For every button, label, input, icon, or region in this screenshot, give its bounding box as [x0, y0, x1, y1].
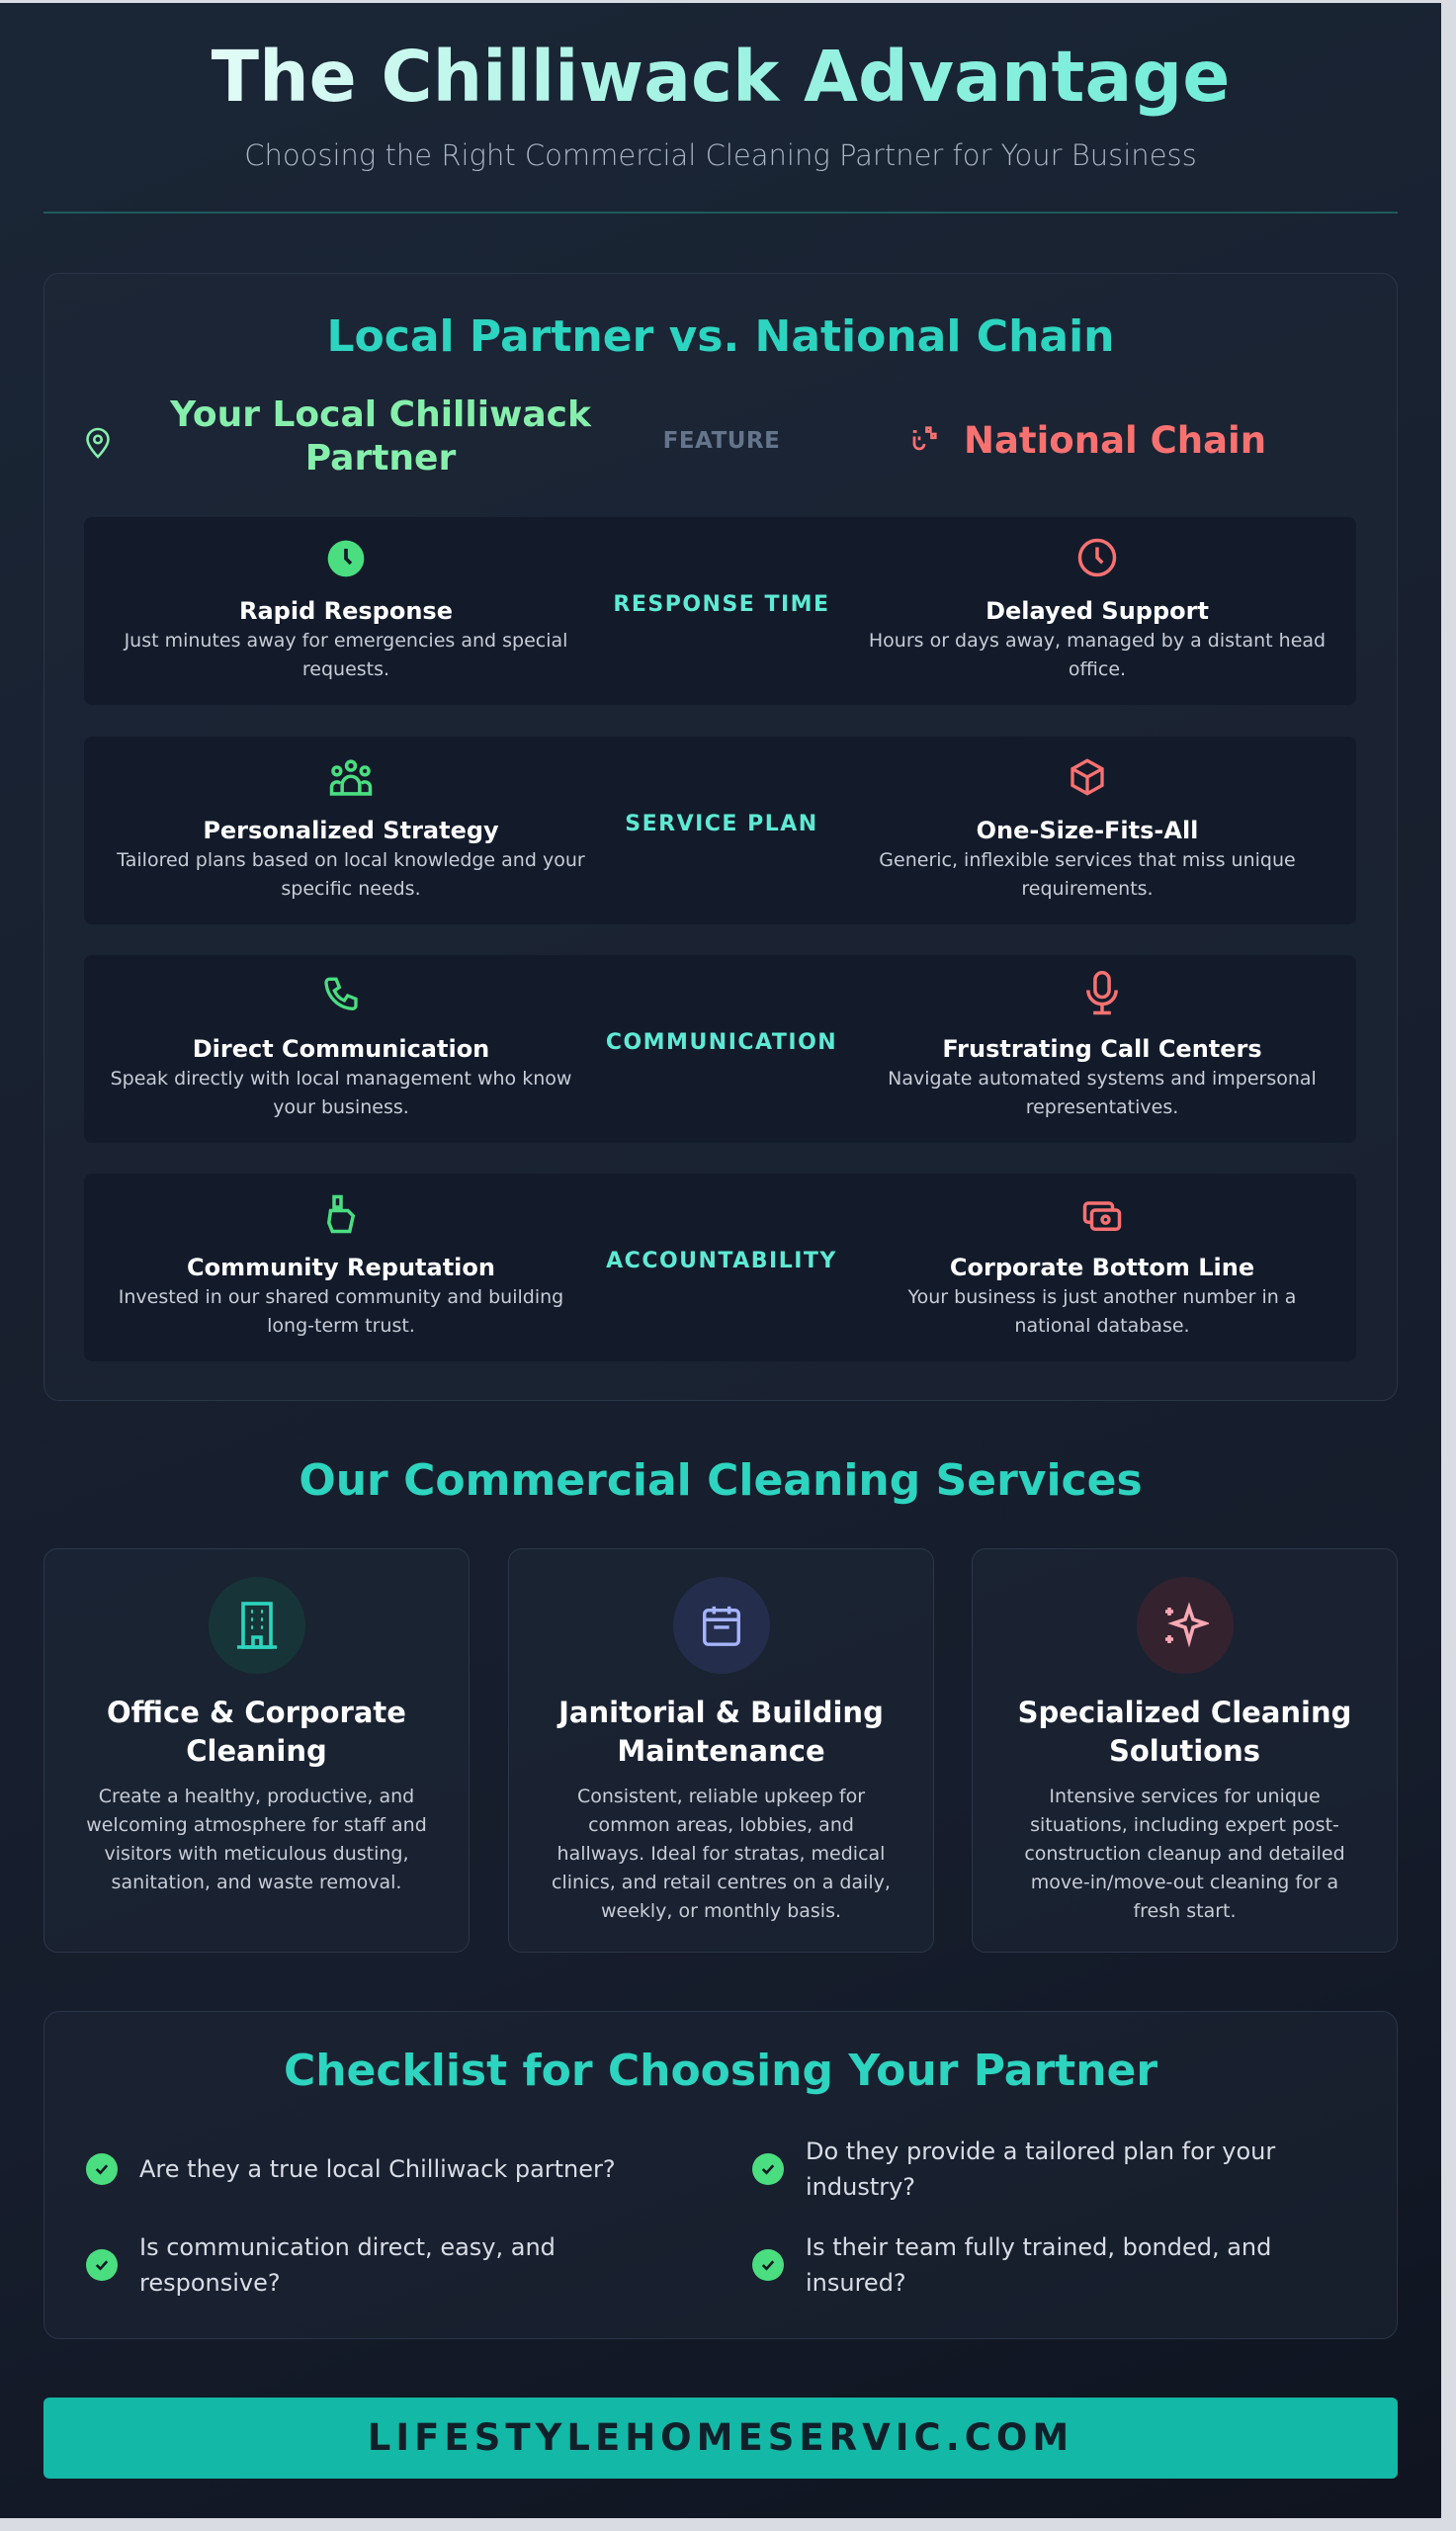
national: one size fits all: Generic, inflexible services that miss unique requirements.: [879, 849, 1296, 900]
row: response time: [84, 517, 1356, 705]
title: [0, 35, 1441, 120]
national: one size fits all: [879, 758, 1296, 900]
card: janitorial: Consistent, reliable upkeep for common areas, lobbies, and hallways. Ideal for stratas, medical clinics, and retail centres on a daily, weekly, or monthly basis.: [552, 1786, 891, 1922]
local: personalized strategy: Tailored plans based on local knowledge and your specific needs.: [117, 849, 585, 900]
subtitle: Choosing the Right Commercial Cleaning Partner for Your Business: [244, 138, 1197, 172]
services heading: Our Commercial Cleaning Services: [299, 1455, 1143, 1506]
national: delayed support: [869, 538, 1326, 680]
national: delayed support: Hours or days away, managed by a distant head office.: [869, 630, 1326, 680]
card: office: [43, 1548, 470, 1953]
local: direct communication: Direct Communication: [193, 1035, 489, 1063]
comparison heading: Local Partner vs. National Chain: [326, 311, 1115, 362]
row: service plan: [84, 737, 1356, 924]
title: The Chilliwack Advantage: [212, 36, 1230, 118]
card: janitorial: [508, 1548, 934, 1953]
panel: comparison: [43, 273, 1398, 1401]
card: janitorial: Janitorial & Building Maintenance: [558, 1696, 884, 1768]
card: specialized: Intensive services for unique situations, including expert post-construction cleanup and detailed move-in/move-out cleaning for a fresh start.: [1024, 1786, 1345, 1922]
icon: building: [208, 1577, 304, 1674]
national: one size fits all: One-Size-Fits-All: [977, 817, 1198, 844]
local: direct communication: Speak directly with local management who know your business.: [111, 1068, 571, 1118]
check item 3: Is communication direct, easy, and responsive?: [139, 2233, 556, 2297]
icon: network: [913, 426, 937, 451]
feature label: ACCOUNTABILITY: [606, 1249, 837, 1273]
national: call centers: Frustrating Call Centers: [942, 1035, 1262, 1063]
icon: sparkles: [1137, 1577, 1234, 1674]
card: specialized: Specialized Cleaning Solutions: [1018, 1696, 1351, 1768]
row: communication: [84, 955, 1356, 1143]
local: personalized strategy: Personalized Strategy: [203, 817, 499, 844]
feature label: SERVICE PLAN: [625, 812, 818, 836]
icon: calendar: [672, 1577, 769, 1674]
footer: website bar: LIFESTYLEHOMESERVIC.COM: [368, 2416, 1073, 2459]
feature label: RESPONSE TIME: [613, 592, 830, 617]
row: accountability: [84, 1174, 1356, 1361]
local: rapid response: [123, 540, 567, 680]
national: call centers: [888, 971, 1317, 1118]
panel: checklist: [43, 2011, 1398, 2339]
check item 1: Are they a true local Chilliwack partner?: [139, 2155, 616, 2183]
national: delayed support: Delayed Support: [985, 597, 1209, 625]
header: local partner: Your Local Chilliwack Partner: [170, 394, 591, 479]
feature label: COMMUNICATION: [606, 1030, 837, 1055]
local: community reputation: [119, 1194, 563, 1337]
icon: map pin: [86, 427, 110, 459]
card: office: Office & Corporate Cleaning: [107, 1696, 406, 1768]
header: feature: FEATURE: [663, 428, 780, 454]
local: community reputation: Community Reputation: [187, 1254, 495, 1281]
local: personalized strategy: [117, 759, 585, 900]
national: bottom line: Your business is just another number in a national database.: [908, 1286, 1296, 1337]
footer: website bar: [43, 2398, 1398, 2479]
national: bottom line: Corporate Bottom Line: [950, 1254, 1254, 1281]
local: community reputation: Invested in our shared community and building long-term trust.: [119, 1286, 563, 1337]
national: call centers: Navigate automated systems and impersonal representatives.: [888, 1068, 1317, 1118]
local: direct communication: [111, 977, 571, 1118]
checklist heading: Checklist for Choosing Your Partner: [284, 2046, 1157, 2096]
card: office: Create a healthy, productive, and welcoming atmosphere for staff and visitors with meticulous dusting, sanitation, and waste removal.: [86, 1786, 427, 1893]
check item 2: Do they provide a tailored plan for your industry?: [806, 2138, 1275, 2201]
card: specialized: [972, 1548, 1398, 1953]
check item 4: Is their team fully trained, bonded, and insured?: [806, 2233, 1271, 2297]
local: rapid response: Just minutes away for emergencies and special requests.: [125, 630, 567, 680]
national: bottom line: [907, 1201, 1296, 1337]
local: rapid response: Rapid Response: [239, 597, 453, 625]
header: national chain: National Chain: [964, 419, 1266, 462]
